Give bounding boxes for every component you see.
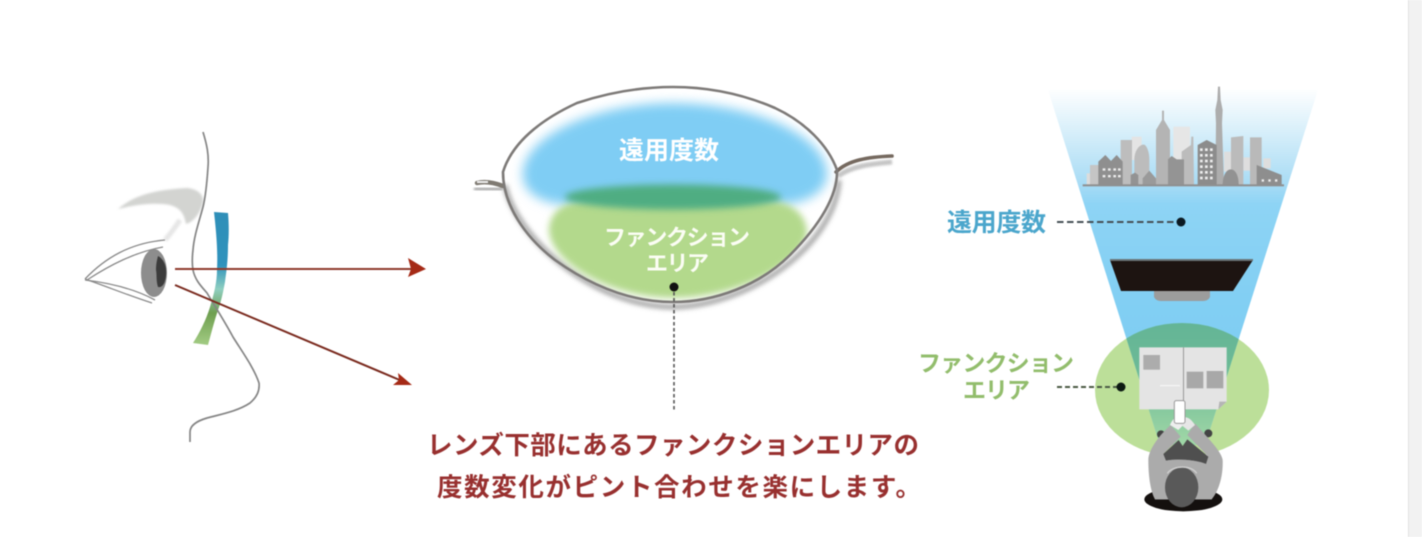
label: far power: 遠用度数 [947,209,1046,237]
label: function area [918,350,1074,403]
eyebrow [118,188,203,224]
function area zone [549,200,807,298]
tinted zones [523,103,827,298]
eyelash shading [165,220,180,240]
function area circle [1095,323,1269,457]
lens cross section [193,212,229,345]
leader: far power [1057,218,1186,226]
leader: function area [1057,382,1126,392]
monitor [1110,259,1253,301]
left hinge [474,182,503,190]
pupil [156,256,166,287]
caption: レンズ下部にあるファンクションエリアの [427,431,919,460]
side view: eye and lens [85,132,426,442]
city skyline [1083,87,1284,186]
overlap zone [565,184,781,210]
temple arm [836,156,892,176]
lens shadow [505,180,839,307]
callout dot and leader [670,282,678,412]
lens label: function area: エリア [646,251,709,276]
lens rim [503,87,837,302]
beam overlap with function area [1126,322,1239,446]
far power zone [523,103,827,205]
lens label: function area: ファンクション [604,225,750,250]
person from above [1144,401,1223,511]
face profile line [190,132,259,442]
arrow: near vision [175,285,412,385]
vision beam [1048,90,1318,445]
arrow: far vision [175,258,426,277]
lens label: function area [604,225,750,276]
lens label: far power: 遠用度数 [619,137,719,165]
caption [427,431,921,502]
open newspaper [1139,347,1227,511]
right scene: vision field [1048,87,1318,511]
eye lids [85,240,165,303]
label: function area: エリア [963,377,1030,403]
caption: 度数変化がピント合わせを楽にします。 [437,473,921,502]
label: function area: ファンクション [918,350,1074,376]
lens front view [474,87,892,412]
iris [141,249,167,297]
scrollbar track [1408,0,1422,537]
